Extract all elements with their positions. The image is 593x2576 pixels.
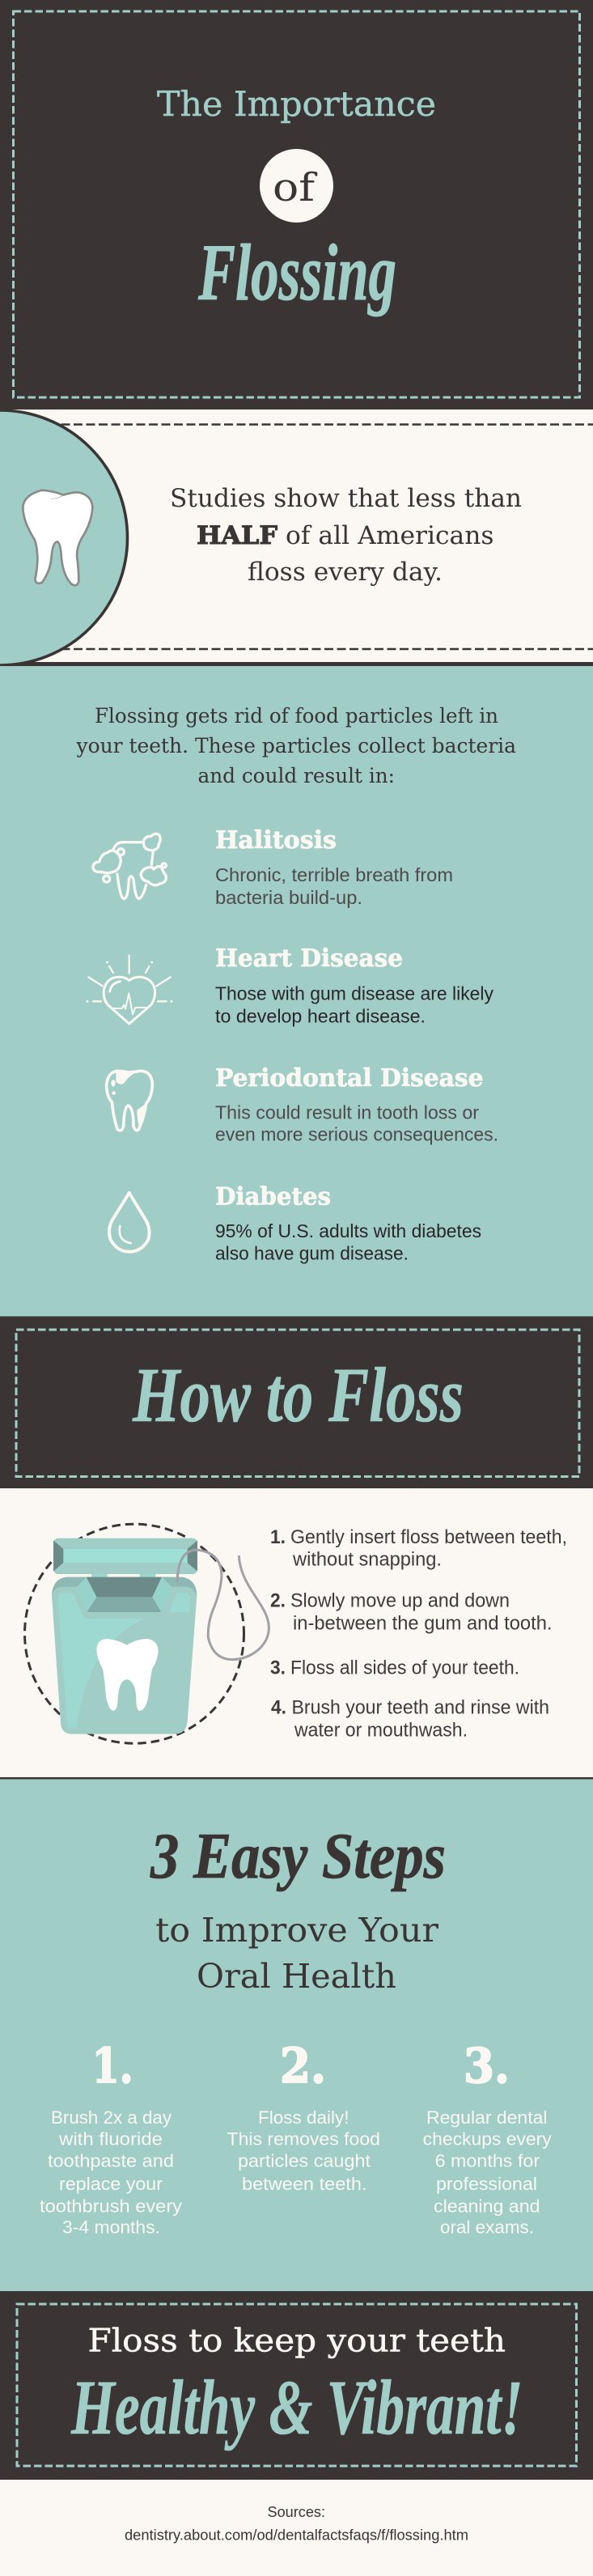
item: diabetes [215,1183,481,1264]
statistic text: floss every day. [248,558,443,587]
column: step 3 checkups: cleaning and [434,2196,540,2216]
panel: sources [0,2480,593,2576]
column: step 2 floss: Floss daily! [258,2107,349,2128]
column: step 2 floss: particles caught [238,2151,371,2171]
column: step 3 checkups: checkups every [423,2128,552,2149]
panel: closing banner [0,2291,593,2480]
item: heart disease: Heart Disease [215,944,403,973]
step 1: 1. [270,1526,286,1548]
subheading: to Improve Your [155,1911,438,1950]
step 4: water or mouthwash. [294,1719,468,1742]
heading: How to Floss: How to Floss [132,1352,464,1438]
column: step 3 checkups [423,2038,552,2237]
icon: tooth [23,490,92,585]
icon: decayed tooth [107,1071,152,1131]
column: step 3 checkups: 3. [464,2038,510,2094]
statistic text: of all Americans [286,521,493,550]
step 4: 4. [271,1696,286,1719]
column: step 3 checkups: 6 months for [435,2151,540,2171]
intro text [76,704,516,787]
subheading [155,1911,438,1996]
badge: of: of [273,165,318,210]
step 2: Slowly move up and down [290,1589,510,1612]
column: step 2 floss [227,2038,380,2194]
intro text: Flossing gets rid of food particles left in [95,704,498,728]
item: periodontal disease: This could result in tooth loss or [215,1102,479,1123]
step 3: Floss all sides of your teeth. [290,1657,519,1678]
column: step 3 checkups: professional [436,2174,537,2194]
step 3: 3. [270,1657,286,1678]
step 1 [270,1526,567,1570]
column: step 3 checkups: Regular dental [426,2107,547,2128]
column: step 2 floss: between teeth. [242,2174,367,2194]
closing line: Floss to keep your teeth [87,2323,506,2360]
icon: halitosis tooth with clouds [93,834,166,899]
panel: risks of not flossing [0,666,593,1317]
column: step 1 brush: replace your [59,2174,163,2194]
item: diabetes: 95% of U.S. adults with diabetes [215,1220,481,1241]
column: step 1 brush: 3-4 months. [62,2217,160,2237]
step 4 [271,1696,549,1742]
column: step 3 checkups: oral exams. [440,2217,534,2237]
panel: sources: Sources: [267,2504,325,2520]
item: diabetes: Diabetes [215,1183,331,1211]
column: step 1 brush: toothpaste and [48,2151,174,2171]
icon: heart with pulse [87,956,172,1024]
panel: 3 easy steps [0,1780,593,2291]
item: heart disease [215,944,493,1026]
column: step 1 brush: with fluoride [58,2128,163,2149]
intro text: and could result in: [197,764,395,787]
step 2 [270,1589,552,1635]
title script: Flossing: Flossing [197,227,396,317]
step 2: in-between the gum and tooth. [293,1612,552,1635]
title line: The Importance: The Importance [157,84,436,124]
intro text: your teeth. These particles collect bacteria [76,734,516,758]
item: diabetes: also have gum disease. [215,1243,409,1264]
item: periodontal disease: Periodontal Disease [215,1064,484,1093]
statistic text [170,484,522,587]
icon: water drop [109,1193,150,1252]
illustration: floss container [24,1524,269,1743]
statistic text: Studies show that less than [170,484,522,513]
circle with tooth [0,410,128,665]
step 1: Gently insert floss between teeth, [290,1526,567,1548]
subheading: Oral Health [197,1957,396,1996]
panel: half of Americans statistic [0,410,593,666]
column: step 2 floss: 2. [280,2038,326,2094]
heading: 3 Easy Steps: 3 Easy Steps [150,1821,446,1892]
item: halitosis [215,826,453,908]
column: step 2 floss: This removes food [227,2128,380,2149]
column: step 1 brush: Brush 2x a day [51,2107,172,2128]
panel: how to floss banner [0,1316,593,1488]
panel: sources: dentistry.about.com/od/dentalfactsfaqs/f/flossing.htm [125,2527,468,2543]
item: halitosis: Chronic, terrible breath from [215,864,453,885]
item: heart disease: Those with gum disease are likely [215,982,493,1004]
item: halitosis: Halitosis [215,826,337,855]
step 4: Brush your teeth and rinse with [291,1696,549,1719]
column: step 1 brush: 1. [92,2038,133,2094]
item: periodontal disease [215,1064,498,1144]
panel: flossing instructions [0,1488,593,1780]
item: halitosis: bacteria build-up. [215,887,362,908]
step 2: 2. [270,1589,286,1612]
panel: title header [0,0,593,410]
item: periodontal disease: even more serious consequences. [215,1123,498,1144]
column: step 1 brush: toothbrush every [40,2196,182,2216]
step 1: without snapping. [292,1549,442,1570]
badge: of [260,149,333,223]
item: heart disease: to develop heart disease. [215,1005,426,1026]
statistic text: HALF [197,521,277,550]
column: step 1 brush [40,2038,182,2237]
